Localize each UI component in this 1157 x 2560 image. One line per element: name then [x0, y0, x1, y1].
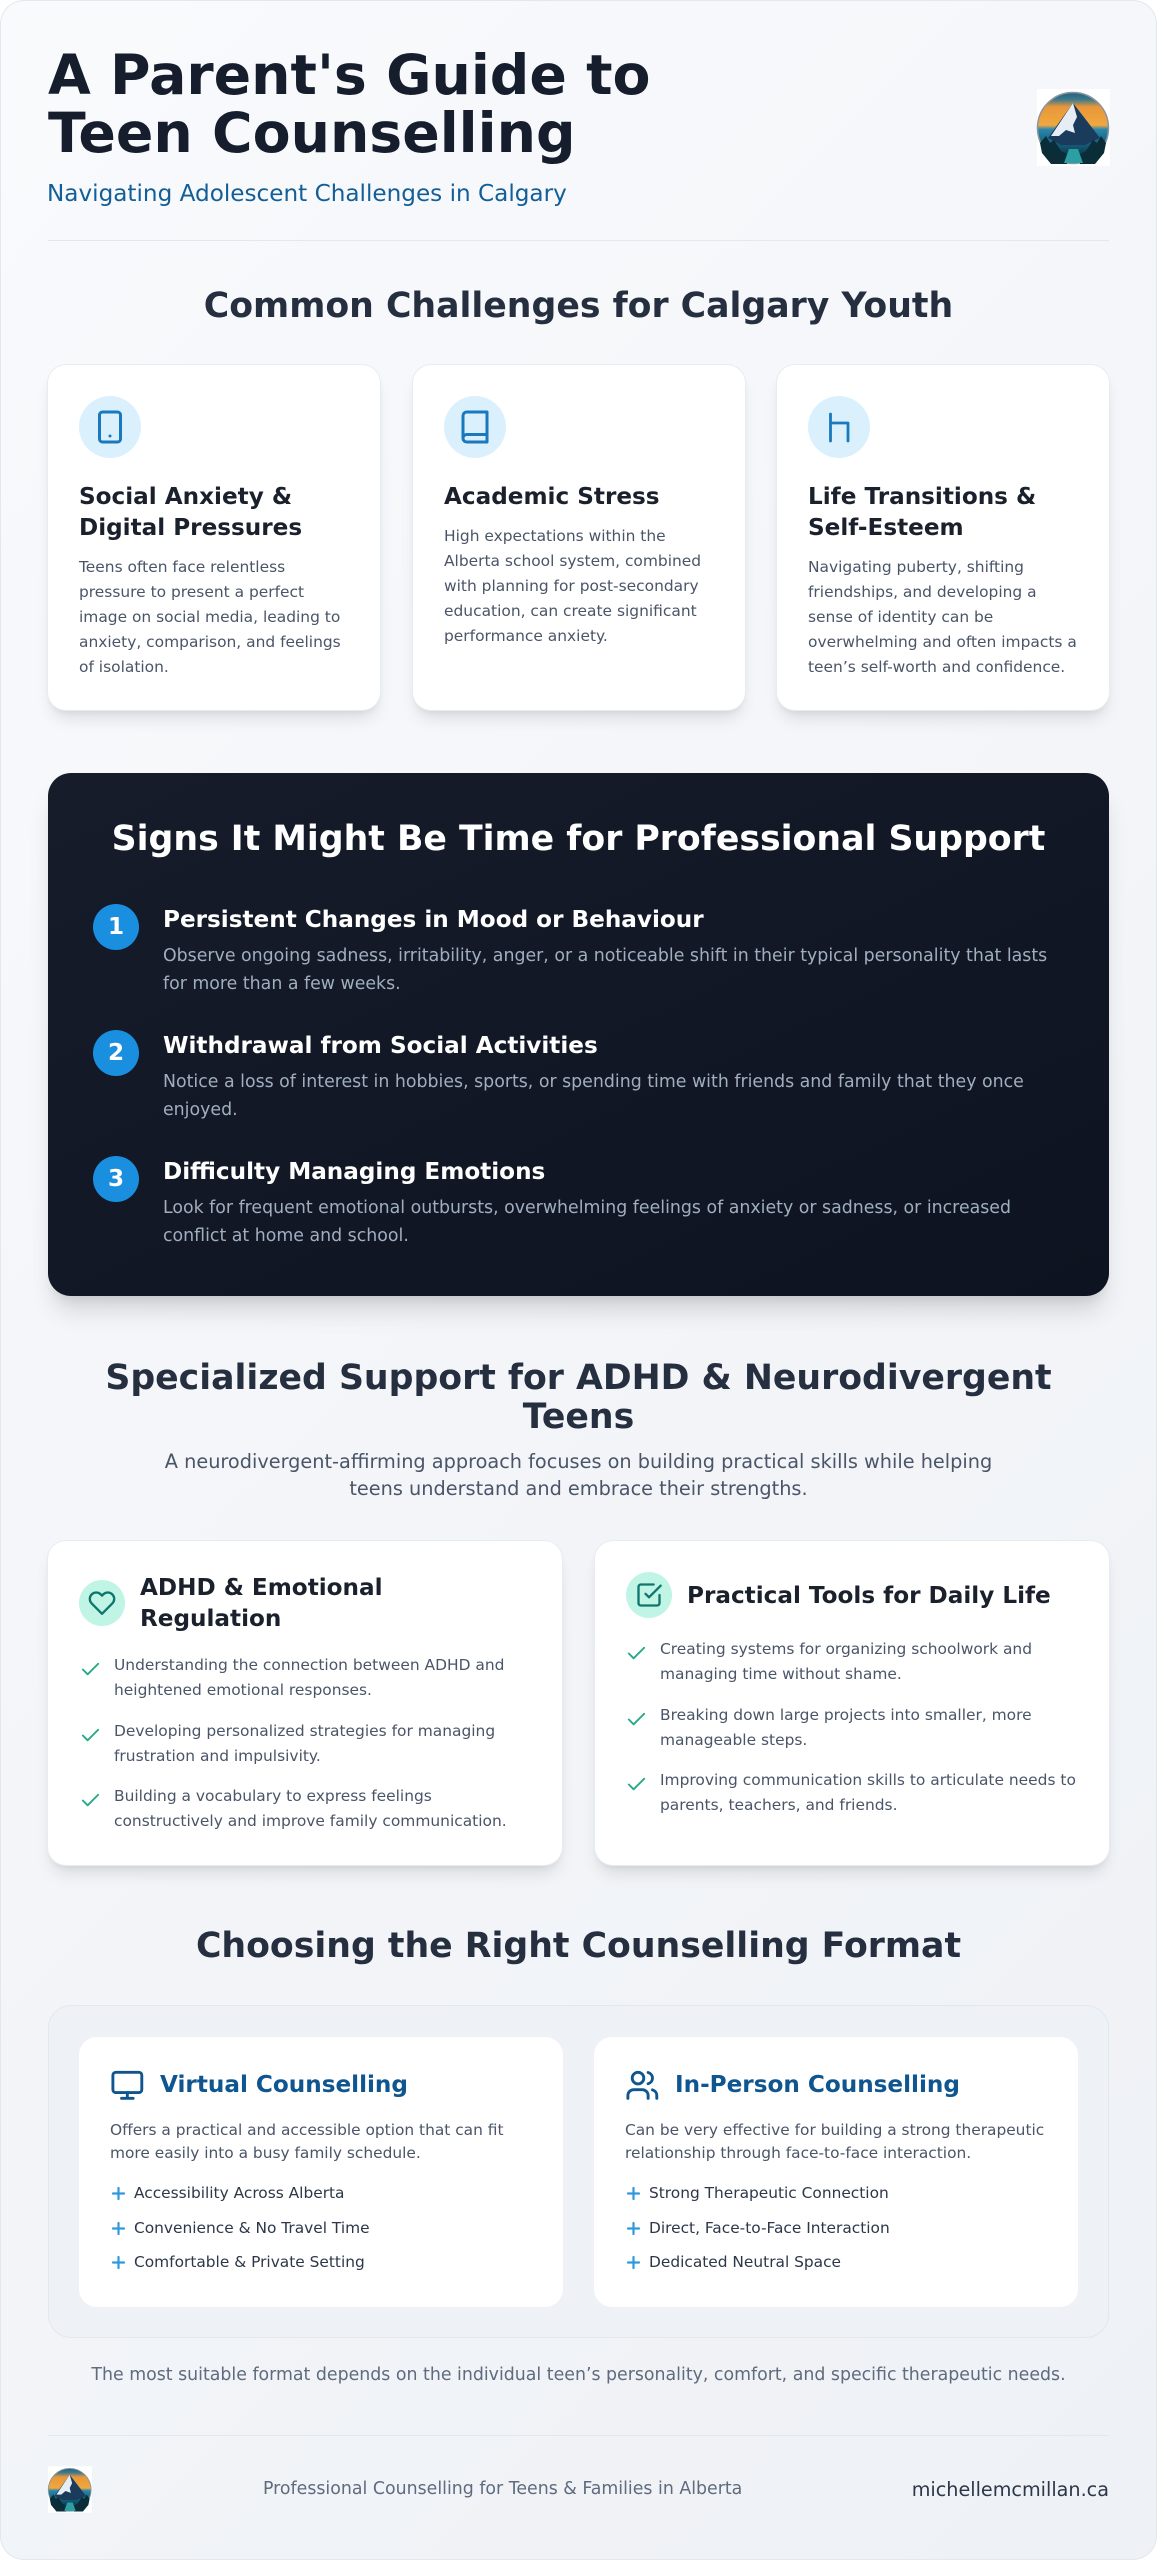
item 1: Understanding the connection between ADHD and	[114, 1656, 504, 1674]
panel: practical tools	[595, 1541, 1109, 1865]
heading: specialized support: Teens	[523, 1397, 634, 1437]
benefit 3: Comfortable & Private Setting	[134, 2253, 365, 2271]
sign 1	[93, 904, 1047, 994]
title	[48, 44, 651, 166]
card text: Alberta school system, combined	[444, 552, 701, 570]
check 1	[82, 1662, 100, 1676]
icon: users	[626, 2070, 658, 2100]
card text: High expectations within the	[444, 527, 666, 545]
item 3	[114, 1787, 507, 1830]
card heading: In-Person Counselling	[675, 2072, 960, 2098]
card heading	[140, 1575, 383, 1632]
heading: counselling format: Choosing the Right Counselling Format	[196, 1926, 961, 1966]
card heading: Social Anxiety &	[79, 484, 292, 510]
sign 3 text: Look for frequent emotional outbursts, overwhelming feelings of anxiety or sadness, or increased	[163, 1198, 1011, 1218]
sign 3 text: conflict at home and school.	[163, 1226, 409, 1246]
benefit 2: Convenience & No Travel Time	[134, 2219, 370, 2237]
card heading: Life Transitions &	[808, 484, 1036, 510]
sign 3	[93, 1156, 1011, 1246]
item 1	[660, 1640, 1032, 1683]
footer logo	[48, 2466, 92, 2513]
number 1: 1	[108, 914, 124, 940]
icon: smartphone	[79, 396, 141, 458]
heading: common challenges: Common Challenges for Calgary Youth	[204, 286, 953, 326]
number 2: 2	[108, 1040, 124, 1066]
card text: more easily into a busy family schedule.	[110, 2144, 421, 2162]
plus 1	[626, 2186, 640, 2200]
sign 3 title: Difficulty Managing Emotions	[163, 1159, 545, 1185]
card text: Navigating puberty, shifting	[808, 558, 1024, 576]
heading: specialized support: Specialized Support for ADHD & Neurodivergent	[105, 1358, 1052, 1398]
card heading: Virtual Counselling	[160, 2072, 408, 2098]
card text: overwhelming and often impacts a	[808, 633, 1077, 651]
check 2	[82, 1728, 100, 1742]
item 2: Breaking down large projects into smaller, more	[660, 1706, 1032, 1724]
icon: abstract h	[808, 396, 870, 458]
card text: of isolation.	[79, 658, 169, 676]
card heading: Practical Tools for Daily Life	[687, 1583, 1051, 1609]
benefit 3: Dedicated Neutral Space	[649, 2253, 841, 2271]
closing note: The most suitable format depends on the individual teen’s personality, comfort, and specific therapeutic needs.	[91, 2365, 1066, 2385]
checklist	[628, 1640, 1076, 1814]
card text: Can be very effective for building a strong therapeutic	[625, 2120, 1044, 2138]
plus 2	[112, 2222, 126, 2236]
card heading: Digital Pressures	[79, 515, 302, 541]
checklist	[82, 1656, 507, 1830]
card text: friendships, and developing a	[808, 583, 1037, 601]
header divider	[48, 240, 1109, 241]
card: virtual counselling	[79, 2037, 563, 2307]
card text: anxiety, comparison, and feelings	[79, 633, 341, 651]
number 1	[93, 904, 139, 950]
item 3: constructively and improve family communication.	[114, 1812, 507, 1830]
plus 1	[112, 2186, 126, 2200]
sign 2 text: enjoyed.	[163, 1100, 238, 1120]
number 2	[93, 1030, 139, 1076]
sign 2	[93, 1030, 1024, 1120]
icon: check square	[626, 1572, 672, 1618]
card text: pressure to present a perfect	[79, 583, 304, 601]
icon: heart	[79, 1580, 125, 1626]
sign 1 text	[163, 946, 1047, 994]
number 3: 3	[108, 1166, 124, 1192]
panel: academic stress card	[413, 365, 745, 710]
benefit 2: Direct, Face-to-Face Interaction	[649, 2219, 890, 2237]
item 3: Building a vocabulary to express feelings	[114, 1787, 432, 1805]
card heading: Regulation	[140, 1606, 281, 1632]
title: Teen Counselling	[48, 102, 576, 166]
card text	[110, 2120, 504, 2162]
item 1: heightened emotional responses.	[114, 1681, 372, 1699]
plus 2	[627, 2222, 640, 2234]
item 2	[660, 1706, 1032, 1749]
sign 2 text: Notice a loss of interest in hobbies, sports, or spending time with friends and family that they once	[163, 1072, 1024, 1092]
card text: teen’s self-worth and confidence.	[808, 658, 1065, 676]
check 2	[628, 1712, 646, 1726]
section intro	[164, 1450, 992, 1500]
sign 3 text	[163, 1198, 1011, 1246]
panel: life transitions card	[777, 365, 1109, 710]
card heading	[79, 484, 302, 541]
card heading: Academic Stress	[444, 484, 660, 510]
panel heading: Signs It Might Be Time for Professional Support	[112, 819, 1045, 859]
plus 3	[627, 2256, 640, 2269]
card heading: ADHD & Emotional	[140, 1575, 383, 1601]
panel: ADHD and emotional regulation	[48, 1541, 562, 1865]
item 3: parents, teachers, and friends.	[660, 1796, 898, 1814]
number 3	[93, 1156, 139, 1202]
card text: performance anxiety.	[444, 627, 608, 645]
card text: with planning for post-secondary	[444, 577, 699, 595]
item 3	[660, 1771, 1076, 1814]
card text: image on social media, leading to	[79, 608, 340, 626]
card text: education, can create significant	[444, 602, 697, 620]
item 2: frustration and impulsivity.	[114, 1747, 321, 1765]
item 3: Improving communication skills to articulate needs to	[660, 1771, 1076, 1789]
benefits list	[626, 2184, 890, 2271]
section intro: teens understand and embrace their strengths.	[349, 1477, 808, 1500]
icon: book	[444, 396, 506, 458]
card heading: Self-Esteem	[808, 515, 964, 541]
sign 2 title: Withdrawal from Social Activities	[163, 1033, 598, 1059]
card heading	[808, 484, 1036, 541]
icon: monitor	[111, 2070, 144, 2100]
card text	[78, 558, 341, 676]
card text: Offers a practical and accessible option that can fit	[110, 2120, 503, 2138]
sign 1 title: Persistent Changes in Mood or Behaviour	[163, 907, 704, 933]
card text	[625, 2120, 1044, 2162]
logo: mountain emblem	[1036, 89, 1110, 166]
footer tagline: Professional Counselling for Teens & Families in Alberta	[263, 2479, 742, 2499]
card text	[444, 527, 701, 645]
plus 3	[112, 2256, 126, 2270]
benefits list	[112, 2184, 370, 2271]
panel: social anxiety card	[48, 365, 380, 710]
sign 2 text	[163, 1072, 1024, 1120]
card text: relationship through face-to-face interaction.	[625, 2144, 971, 2162]
heading: specialized support	[105, 1358, 1052, 1437]
sign 1 text: Observe ongoing sadness, irritability, anger, or a noticeable shift in their typical personality that lasts	[163, 946, 1047, 966]
footer website: michellemcmillan.ca	[912, 2478, 1109, 2501]
title: A Parent's Guide to	[48, 44, 651, 108]
item 1: managing time without shame.	[660, 1665, 902, 1683]
item 1	[114, 1656, 504, 1699]
item 1: Creating systems for organizing schoolwork and	[660, 1640, 1032, 1658]
benefit 1: Accessibility Across Alberta	[134, 2184, 344, 2202]
check 1	[628, 1646, 646, 1660]
item 2: Developing personalized strategies for managing	[114, 1722, 495, 1740]
panel: format comparison	[48, 2005, 1109, 2338]
benefit 1: Strong Therapeutic Connection	[649, 2184, 889, 2202]
item 2	[114, 1722, 495, 1765]
check 3	[628, 1778, 646, 1790]
check 3	[82, 1794, 100, 1806]
card text: sense of identity can be	[808, 608, 993, 626]
footer divider	[48, 2435, 1109, 2436]
item 2: manageable steps.	[660, 1731, 807, 1749]
section intro: A neurodivergent-affirming approach focuses on building practical skills while helping	[165, 1450, 992, 1473]
card: in-person counselling	[594, 2037, 1078, 2307]
card text: Teens often face relentless	[79, 558, 285, 576]
panel: signs for professional support	[48, 773, 1109, 1296]
card text	[808, 558, 1077, 676]
subtitle: Navigating Adolescent Challenges in Calgary	[47, 181, 567, 207]
sign 1 text: for more than a few weeks.	[163, 974, 401, 994]
